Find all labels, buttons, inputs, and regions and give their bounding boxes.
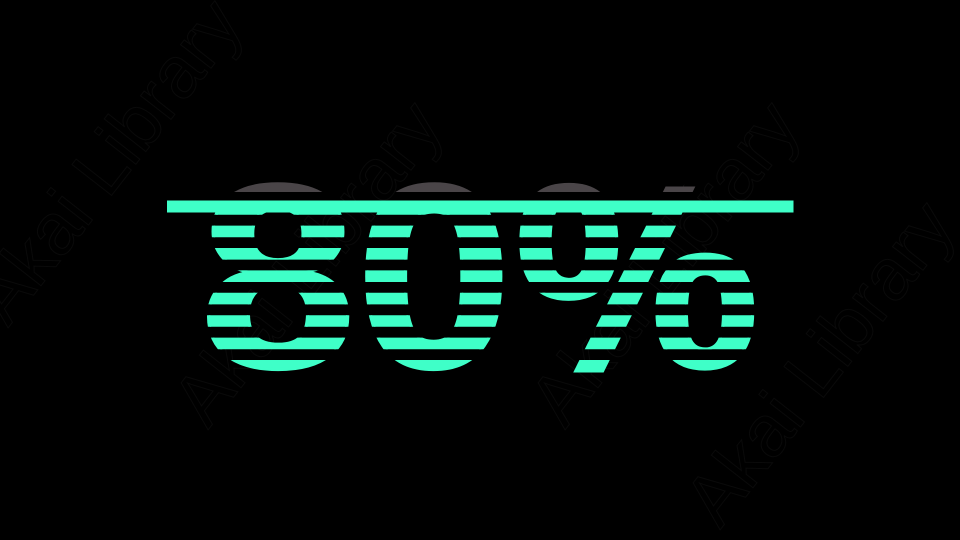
watermarks: Akai Library (157, 86, 458, 440)
grey top slice of 80%: % (514, 130, 760, 423)
grey top slice of 80%: 0 (356, 130, 512, 423)
striped 80% figure: 8 (200, 130, 356, 423)
grey top slice of 80%: / (553, 140, 713, 427)
striped 80% figure: / (553, 140, 713, 427)
striped 80% figure: % (514, 130, 760, 423)
grey top slice of 80% (234, 182, 696, 192)
striped 80% figure: 0 (356, 130, 512, 423)
watermarks: Akai Library (514, 86, 815, 440)
striped 80% figure (207, 212, 754, 372)
horizontal strike bar (167, 200, 794, 212)
grey top slice of 80%: 8 (200, 130, 356, 423)
